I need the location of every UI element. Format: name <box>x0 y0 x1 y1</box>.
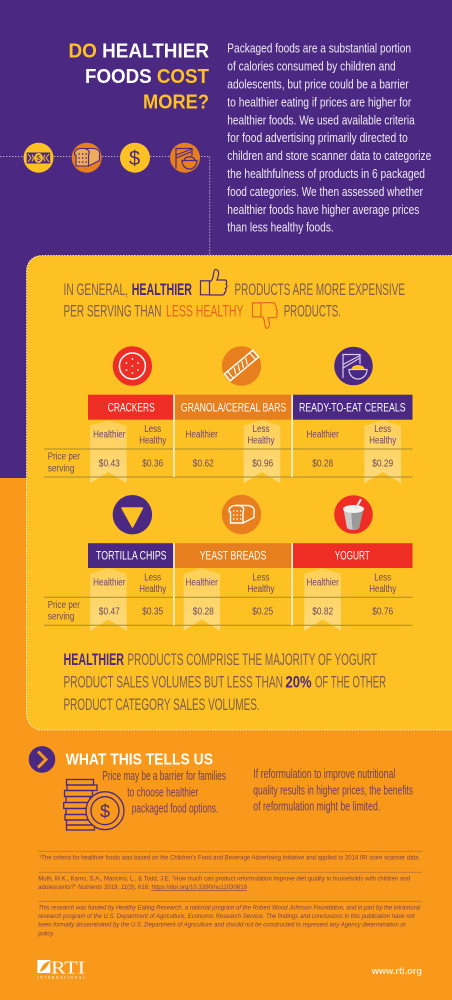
text block: price barrier: packaged food options. <box>132 801 218 815</box>
intro text block: adolescents, but price could be a barrier <box>227 78 409 92</box>
intro text block: than less healthy foods. <box>227 221 334 235</box>
column labels <box>93 572 396 595</box>
column labels: Healthy <box>248 584 274 595</box>
funding statement: research program of the U.S. Department of Agriculture, Economic Research Service. The findings and conclusions in this publication have not <box>38 913 416 920</box>
text block: sales volume finding: PRODUCT SALES VOLUMES BUT LESS THAN <box>64 674 283 692</box>
column labels: Less <box>374 424 391 435</box>
prices: $0.76 <box>372 606 393 618</box>
header: tortilla chips: TORTILLA CHIPS <box>96 550 167 562</box>
header: tortilla chips <box>88 543 173 568</box>
prices: $0.28 <box>312 458 333 470</box>
intro text block <box>227 42 431 235</box>
intro text block: for food advertising primarily directed to <box>227 131 408 145</box>
text block: sales volume finding: 20% <box>286 674 312 692</box>
citation <box>38 875 410 891</box>
row label: price per serving: serving <box>48 463 74 474</box>
row label: price per serving: serving <box>48 612 74 623</box>
icon: chevron badge <box>29 746 55 773</box>
heading: general finding: PER SERVING THAN <box>64 303 162 321</box>
prices: $0.62 <box>193 458 214 470</box>
prices: $0.35 <box>142 606 163 618</box>
icon: cereal bowl <box>334 347 373 385</box>
citation: Muth, M.K., Karns, S.A., Mancino, L., & Todd, J.E. "How much can product reformulation improve diet quality in households with children and <box>38 875 410 882</box>
header: yogurt <box>293 543 412 568</box>
column labels: Healthier <box>93 578 126 588</box>
text block: sales volume finding: HEALTHIER <box>64 651 124 669</box>
header: granola <box>175 395 292 420</box>
row label: price per serving <box>48 600 81 623</box>
prices: $0.82 <box>312 606 333 618</box>
icon: yeast bread <box>222 495 261 534</box>
header: yogurt: YOGURT <box>335 550 370 562</box>
prices: $0.25 <box>252 606 273 618</box>
column labels: Healthier <box>307 429 339 440</box>
column labels: Healthy <box>369 584 396 595</box>
header: granola: GRANOLA/CEREAL BARS <box>181 402 286 414</box>
icon: yogurt cup <box>334 495 373 534</box>
prices <box>99 606 393 618</box>
row label: price per serving: Price per <box>48 600 81 611</box>
text block: reformulation <box>253 767 413 814</box>
heading: general finding: HEALTHIER <box>132 281 192 299</box>
column labels: Healthy <box>369 436 396 447</box>
table: crackers, granola bars, cereals <box>44 395 412 483</box>
icon: coin stack <box>64 780 124 830</box>
icon: dollar coin: $ <box>129 148 140 170</box>
logo: RTI International <box>37 957 85 980</box>
icon: thumbs up <box>200 269 227 295</box>
header: cereals <box>293 395 412 420</box>
logo: RTI International: RTI <box>51 957 85 977</box>
column labels: Less <box>252 424 270 435</box>
title: FOODS COST <box>85 66 209 88</box>
title: MORE? <box>143 92 209 114</box>
funding statement: This research was funded by Healthy Eating Research, a national program of the Robert Wood Johnson Foundation, and in part by the intramural <box>38 904 421 911</box>
icon: dollar coin <box>120 143 150 173</box>
prices <box>99 458 393 470</box>
icon: thumbs down <box>252 303 277 328</box>
column labels <box>93 424 396 447</box>
text block: sales volume finding <box>64 651 386 714</box>
website: www.rti.org <box>371 966 422 977</box>
text block: sales volume finding: OF THE OTHER <box>315 674 386 692</box>
icon: granola bar <box>222 346 261 386</box>
header: cereals: READY-TO-EAT CEREALS <box>299 402 406 414</box>
heading: general finding: IN GENERAL, <box>64 281 128 299</box>
icon: money bill: $ <box>36 154 41 163</box>
prices: $0.36 <box>142 458 163 470</box>
intro text block: Packaged foods are a substantial portion <box>227 42 411 56</box>
text block: reformulation: of reformulation might be limited. <box>253 800 380 814</box>
heading: what this tells us: WHAT THIS TELLS US <box>66 751 213 768</box>
icon: coin stack: $ <box>100 802 110 822</box>
column labels: Less <box>374 572 391 583</box>
heading: general finding <box>64 281 405 321</box>
heading: general finding: LESS HEALTHY <box>166 303 244 321</box>
header: crackers: CRACKERS <box>108 402 155 414</box>
funding statement: policy. <box>37 930 54 937</box>
text block: reformulation: If reformulation to improve nutritional <box>253 767 395 781</box>
column labels: Healthier <box>307 578 339 588</box>
row label: price per serving: Price per <box>48 452 81 463</box>
table: tortilla chips, yeast breads, yogurt <box>44 543 412 631</box>
prices: $0.96 <box>252 458 273 470</box>
title: DO HEALTHIER <box>68 41 210 63</box>
column labels: Healthy <box>139 584 166 595</box>
intro text block: of calories consumed by children and <box>227 60 396 74</box>
row label: price per serving <box>48 452 81 474</box>
footnote: criteria: ¹The criteria for healthier foods was based on the Children's Food and Beverage Advertising Initiative and applied to 2014 IRI store scanner data. <box>39 854 420 861</box>
column labels: Less <box>144 424 161 435</box>
column labels: Healthy <box>248 436 274 447</box>
text block: sales volume finding: PRODUCT CATEGORY SALES VOLUMES. <box>64 696 260 714</box>
panel: main findings <box>26 256 452 730</box>
prices: $0.43 <box>99 458 120 470</box>
prices: $0.29 <box>372 458 393 470</box>
citation: adolescents?" Nutrients 2019, 11(3), 618; https://doi.org/10.3390/nu11030618 <box>38 884 247 891</box>
text block: price barrier: Price may be a barrier for families <box>102 769 226 783</box>
text block: price barrier: to choose healthier <box>127 785 198 799</box>
text block: price barrier <box>102 769 226 815</box>
column labels: Healthier <box>93 429 126 440</box>
funding statement <box>37 904 421 937</box>
column labels: Healthy <box>139 436 166 447</box>
header: yeast breads: YEAST BREADS <box>200 550 266 562</box>
column labels: Healthier <box>186 429 218 440</box>
ribbons: healthier or higher price highlights <box>90 568 341 631</box>
ribbons: healthier or higher price highlights <box>90 420 401 483</box>
column labels: Healthier <box>186 578 218 588</box>
header: yeast breads <box>175 543 292 568</box>
icon: money bill <box>24 143 54 173</box>
icon: cracker <box>113 346 152 386</box>
title <box>68 41 210 114</box>
header: crackers <box>88 395 173 420</box>
icon: cereal box <box>170 143 200 173</box>
intro text block: to healthier eating if prices are higher for <box>227 95 411 109</box>
heading: general finding: PRODUCTS. <box>284 303 341 321</box>
logo: RTI International: INTERNATIONAL <box>37 976 85 980</box>
icon: bread <box>72 143 102 173</box>
column labels: Less <box>252 572 270 583</box>
column labels: Less <box>144 572 161 583</box>
icon: tortilla chip <box>113 495 152 534</box>
prices: $0.47 <box>99 606 120 618</box>
prices: $0.28 <box>193 606 214 618</box>
funding statement: been formally disseminated by the U.S. Department of Agriculture and should not be constructed to represent any Agency determination or <box>38 922 406 929</box>
